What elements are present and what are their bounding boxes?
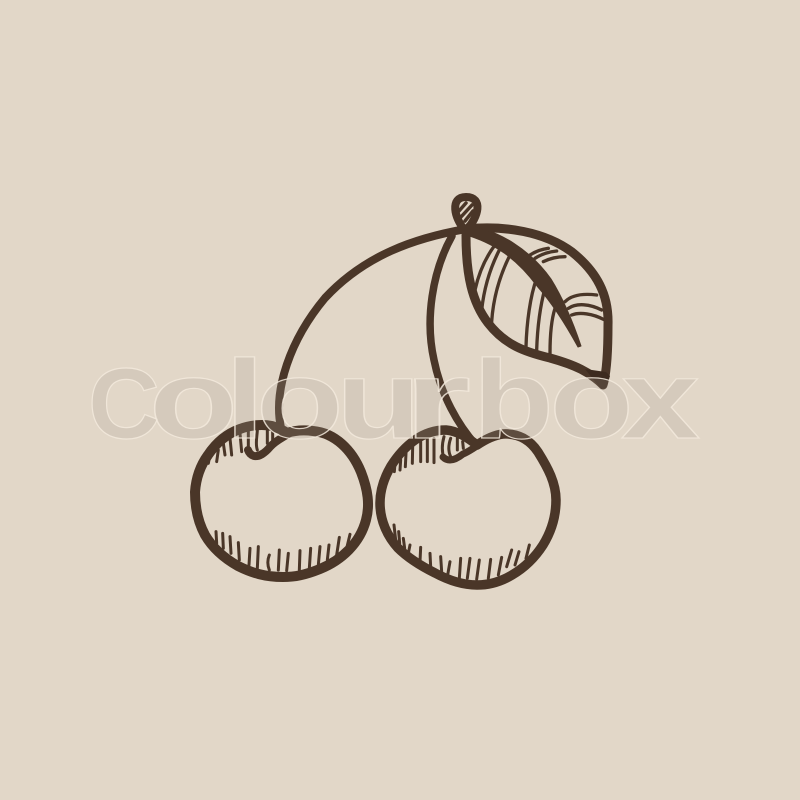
icon: cherries with leaf	[195, 197, 610, 585]
left cherry outline	[195, 425, 368, 577]
watermark: Colourbox: l	[225, 337, 265, 462]
watermark: Colourbox: r	[404, 337, 471, 462]
watermark: Colourbox	[88, 337, 700, 462]
leaf midrib	[463, 225, 581, 347]
right cherry outline	[380, 430, 556, 585]
leaf veins	[475, 245, 603, 353]
leaf tip	[585, 369, 610, 389]
icon: right cherry	[380, 430, 556, 585]
arched stem to left cherry	[279, 229, 466, 428]
left cherry shading ticks	[208, 430, 350, 571]
watermark: Colourbox: C	[88, 348, 160, 460]
watermark: Colourbox: o	[149, 337, 238, 462]
icon: left cherry	[195, 425, 368, 577]
watermark: Colourbox: b	[473, 337, 554, 462]
watermark: Colourbox: x	[621, 337, 700, 462]
right cherry dimple	[443, 446, 477, 460]
leaf outline	[466, 228, 608, 385]
watermark: Colourbox: o	[256, 337, 344, 462]
icon: stem loop	[455, 197, 477, 229]
watermark: Colourbox: o	[550, 337, 634, 462]
icon: leaf	[463, 225, 610, 389]
left cherry dimple	[248, 434, 288, 456]
stem to right cherry	[430, 236, 476, 445]
watermark: Colourbox: u	[336, 337, 422, 462]
right cherry shading ticks	[394, 437, 529, 579]
